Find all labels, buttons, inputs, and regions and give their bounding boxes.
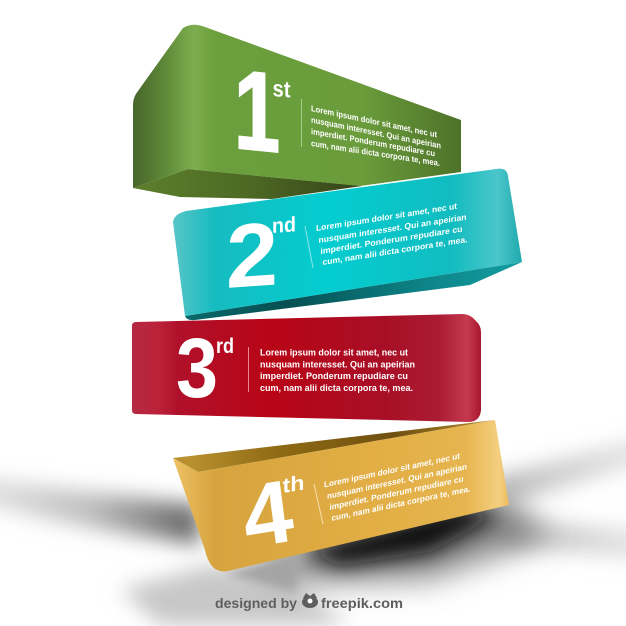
green front face [133,25,461,188]
cyan text block: Lorem ipsum dolor sit amet, nec ut [316,201,457,233]
green text block [311,103,441,168]
numeral 2nd: 2 [226,203,278,308]
red text block: nusquam interesset. Qui an apeirian [260,360,415,370]
floor shadows [0,436,626,625]
cyan front face [173,169,522,316]
numeral 3rd: 3 [176,321,218,415]
cyan divider [305,226,313,268]
attribution: designed by freepik.com: freepik.com [321,595,403,611]
green text block: imperdiet. Ponderum repudiare cu [311,126,435,158]
icon: freepik logo [302,593,318,608]
green underside [133,169,362,199]
cyan text block: imperdiet. Ponderum repudiare cu [320,224,462,256]
yellow text block [324,451,470,523]
cyan text block [316,201,468,267]
green divider [300,99,302,147]
yellow text block: imperdiet. Ponderum repudiare cu [330,474,464,512]
cyan text block: cum, nam alii dicta corpora te, mea. [322,234,468,267]
panel: 1st green band [133,25,461,199]
yellow text block: Lorem ipsum dolor sit amet, nec ut [324,451,460,489]
numeral 1st: 1 [234,46,280,176]
numeral 1st: st [272,75,291,102]
red text block: imperdiet. Ponderum repudiare cu [260,371,408,381]
green text block: nusquam interesset. Qui an apeirian [311,115,441,150]
attribution: designed by freepik.com [215,593,403,611]
red text block: Lorem ipsum dolor sit amet, nec ut [260,348,408,358]
red text block [260,348,415,393]
yellow inner face [173,420,495,472]
red divider [248,347,250,392]
cyan underside [185,262,522,320]
red front face [132,314,481,422]
numeral 2nd: nd [272,213,296,238]
yellow text block: cum, nam alii dicta corpora te, mea. [332,483,470,523]
cyan text block: nusquam interesset. Qui an apeirian [318,212,466,245]
numeral 4th: th [282,472,304,498]
panel: 2nd cyan band [173,169,522,320]
red text block: cum, nam alii dicta corpora te, mea. [260,383,413,393]
numeral 4th: 4 [237,460,298,567]
yellow divider [314,484,323,524]
yellow text block: nusquam interesset. Qui an apeirian [327,461,467,501]
panel: 3rd red band [132,314,481,422]
numeral 3rd: rd [216,335,234,358]
panel: 4th yellow band [173,420,509,571]
yellow front face [173,420,509,571]
green text block: Lorem ipsum dolor sit amet, nec ut [311,103,437,139]
attribution: designed by freepik.com: designed by [215,595,297,611]
green text block: cum, nam alii dicta corpora te, mea. [311,138,440,168]
